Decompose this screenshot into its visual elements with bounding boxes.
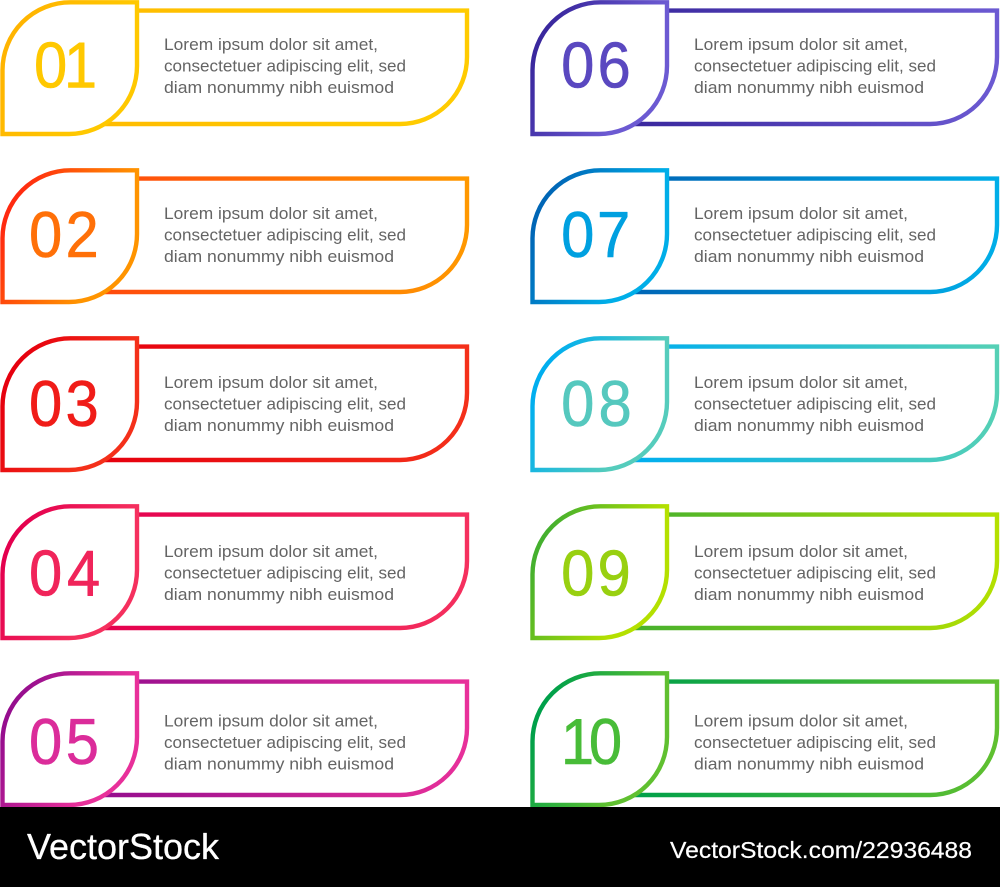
footer bar [0,807,1000,887]
panel: item 03: 03 [29,368,99,440]
panel: item 08: Lorem ipsum dolor sit amet, [694,373,908,392]
panel: item 01: Lorem ipsum dolor sit amet, [164,35,378,54]
panel: item 02: Lorem ipsum dolor sit amet, [164,204,378,223]
panel: item 06: 06 [561,29,631,102]
panel: item 08 [532,338,997,470]
panel: item 05: Lorem ipsum dolor sit amet, [164,712,378,730]
panel: item 04: diam nonummy nibh euismod [164,585,394,604]
panel: item 06: consectetuer adipiscing elit, sed [694,56,936,76]
panel: item 05: consectetuer adipiscing elit, sed [164,733,406,752]
panel: item 04: 04 [29,537,100,610]
panel: item 09 [532,506,997,638]
panel: item 09: consectetuer adipiscing elit, sed [694,564,936,582]
panel: item 09: diam nonummy nibh euismod [694,585,924,604]
panel: item 03: consectetuer adipiscing elit, sed [164,394,406,414]
brand name: VectorStock [27,826,220,867]
panel: item 07 [532,170,997,302]
panel: item 10: diam nonummy nibh euismod [694,754,924,773]
panel: item 02: consectetuer adipiscing elit, sed [164,226,406,244]
panel: item 03: Lorem ipsum dolor sit amet, [164,373,378,392]
panel: item 09: Lorem ipsum dolor sit amet, [694,542,908,561]
panel: item 10 [532,673,997,805]
panel: item 03: diam nonummy nibh euismod [164,416,394,435]
panel: item 07: Lorem ipsum dolor sit amet, [694,204,908,223]
panel: item 06 [532,2,997,134]
panel: item 04 [2,506,467,638]
panel: item 06: Lorem ipsum dolor sit amet, [694,35,908,54]
panel: item 01 [2,2,467,134]
image id: VectorStock.com/22936488 [670,837,972,863]
panel: item 07: consectetuer adipiscing elit, sed [694,226,936,244]
panel: item 03 [2,338,467,470]
panel: item 02 [2,170,467,302]
panel: item 01: diam nonummy nibh euismod [164,78,394,97]
panel: item 01: consectetuer adipiscing elit, sed [164,56,406,76]
panel: item 07: 07 [561,199,630,272]
panel: item 06: diam nonummy nibh euismod [694,78,924,97]
panel: item 10: 10 [561,706,622,779]
panel: item 05: 05 [29,706,99,779]
panel: item 02: 02 [29,199,99,272]
panel: item 04: consectetuer adipiscing elit, sed [164,564,406,582]
panel: item 08: diam nonummy nibh euismod [694,416,924,435]
panel: item 05 [2,673,467,805]
panel: item 02: diam nonummy nibh euismod [164,247,394,266]
panel: item 09: 09 [561,537,631,610]
panel: item 07: diam nonummy nibh euismod [694,247,924,266]
panel: item 10: consectetuer adipiscing elit, sed [694,733,936,752]
panel: item 10: Lorem ipsum dolor sit amet, [694,712,908,730]
panel: item 08: consectetuer adipiscing elit, sed [694,394,936,414]
panel: item 08: 08 [561,368,632,440]
panel: item 05: diam nonummy nibh euismod [164,754,394,773]
panel: item 01: 01 [34,29,97,102]
panel: item 04: Lorem ipsum dolor sit amet, [164,542,378,561]
